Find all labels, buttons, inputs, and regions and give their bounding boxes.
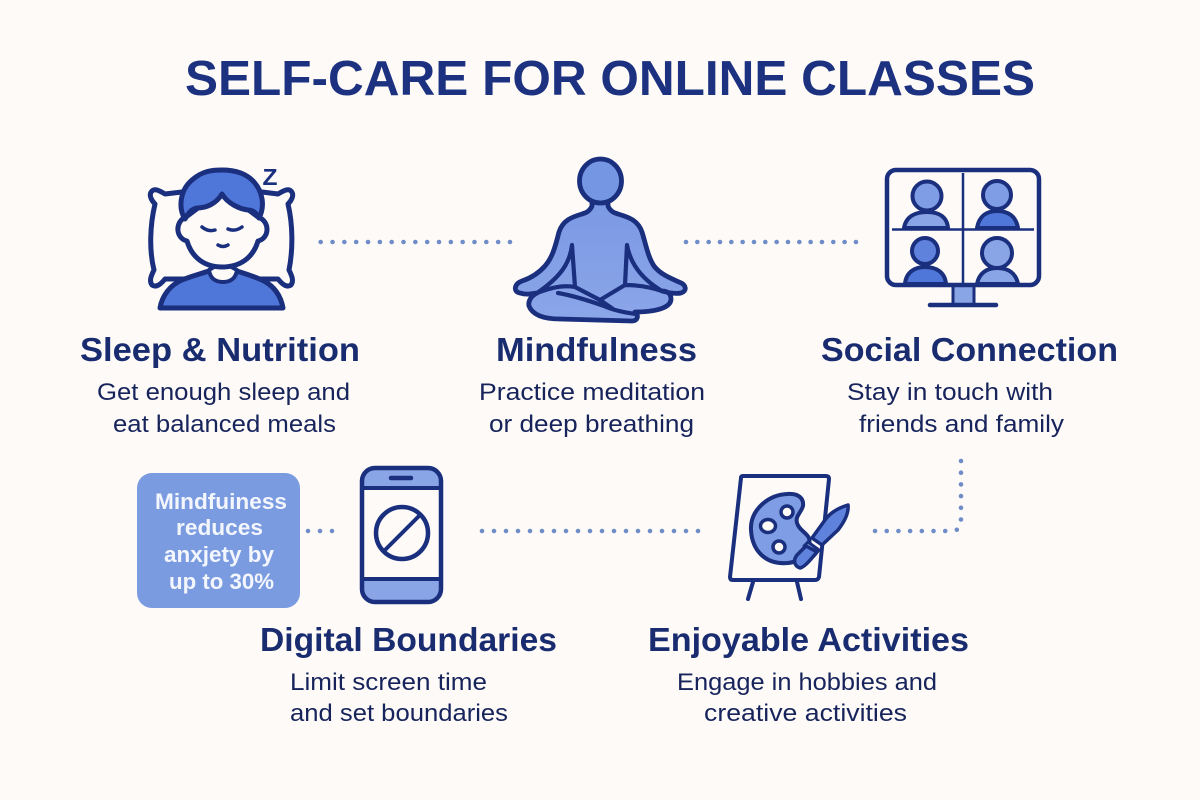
description: or deep breathing	[489, 411, 694, 438]
connector: mindfulness to social	[686, 240, 856, 244]
description: Stay in touch with	[847, 379, 1053, 406]
description: Engage in hobbies and	[677, 669, 937, 696]
description	[479, 379, 705, 438]
heading: Social Connection	[821, 331, 1118, 368]
participant top right	[977, 181, 1018, 228]
icon: video call monitor	[887, 170, 1039, 305]
heading: Digital Boundaries	[260, 621, 557, 658]
callout: mindfulness statistic: anxjety by	[164, 542, 275, 567]
description: Get enough sleep and	[97, 379, 350, 406]
title: SELF-CARE FOR ONLINE CLASSES	[185, 52, 1035, 106]
callout: mindfulness statistic: Mindfuiness	[155, 489, 287, 514]
description	[97, 379, 350, 438]
card: sleep and nutrition	[80, 331, 360, 438]
description: creative activities	[704, 700, 907, 727]
heading: Enjoyable Activities	[648, 621, 969, 658]
easel legs	[748, 582, 801, 599]
paintbrush	[795, 505, 848, 568]
participant top left	[904, 182, 948, 228]
connector: digital to callout	[308, 529, 333, 533]
palette	[751, 494, 809, 563]
description: Practice meditation	[479, 379, 705, 406]
description: friends and family	[859, 411, 1065, 438]
participant bottom right	[977, 238, 1018, 284]
callout: mindfulness statistic: up to 30%	[169, 569, 274, 594]
icon: phone with block sign	[362, 468, 441, 602]
description	[677, 669, 937, 727]
card: social connection	[821, 331, 1118, 438]
description: Limit screen time	[290, 669, 487, 696]
description: and set boundaries	[290, 700, 508, 727]
card: digital boundaries	[260, 621, 557, 727]
connector: sleep to mindfulness	[321, 240, 511, 244]
participant bottom left	[905, 238, 946, 284]
card: mindfulness	[479, 331, 705, 438]
description: eat balanced meals	[113, 411, 336, 438]
icon letter: Z: Z	[262, 164, 278, 190]
callout: mindfulness statistic: reduces	[176, 515, 263, 540]
connector: activities to digital	[482, 529, 699, 533]
description	[290, 669, 508, 727]
card: enjoyable activities	[648, 621, 969, 727]
monitor stand	[930, 285, 996, 305]
connector: social to activities	[874, 461, 961, 531]
icon: palette and brush on easel	[730, 476, 848, 599]
description	[847, 379, 1065, 438]
canvas	[730, 476, 829, 580]
heading: Mindfulness	[496, 331, 697, 368]
heading: Sleep & Nutrition	[80, 331, 360, 368]
icon: sleeping person	[150, 164, 293, 308]
icon: meditating figure	[515, 159, 685, 321]
callout: mindfulness statistic	[137, 473, 300, 608]
